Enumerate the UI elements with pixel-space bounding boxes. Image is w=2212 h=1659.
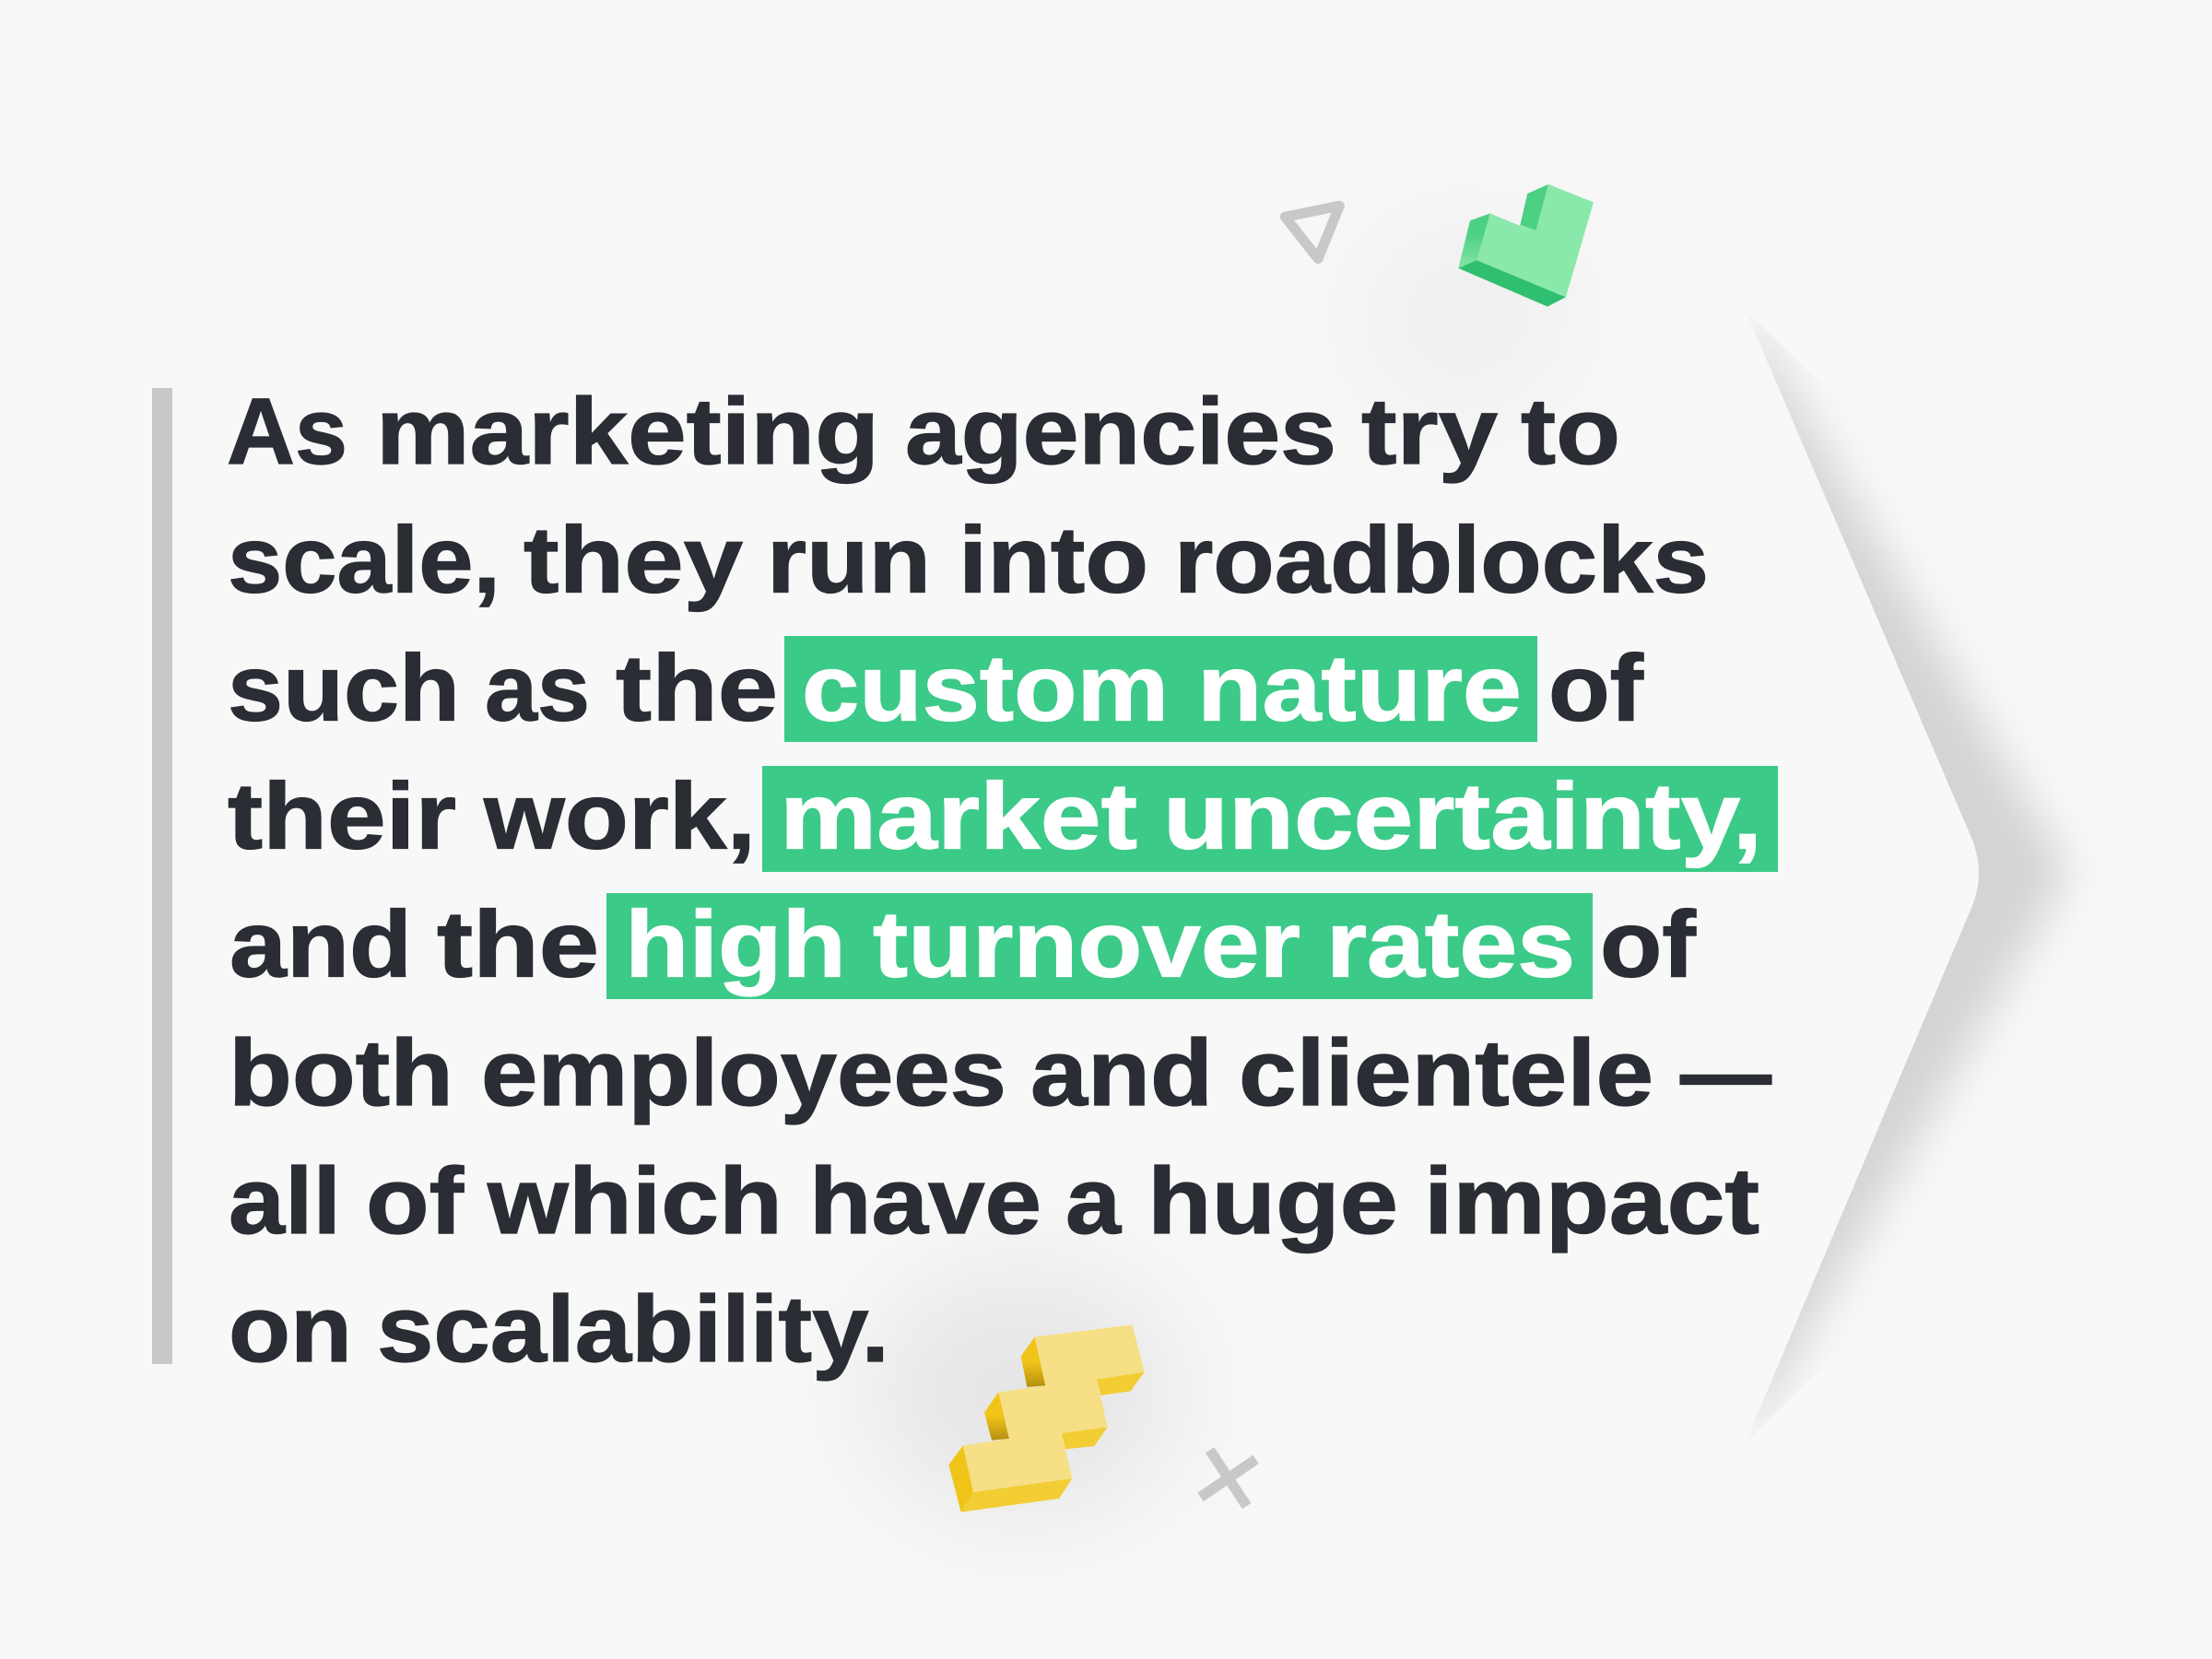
line 2: run: [767, 507, 931, 612]
line 2: into: [959, 507, 1148, 612]
line 5: and: [229, 892, 412, 997]
line 7: which: [487, 1148, 782, 1253]
line 7: huge: [1147, 1148, 1398, 1253]
line 5 end: of: [1600, 892, 1697, 997]
line 7: have: [809, 1148, 1041, 1253]
line 6: clientele: [1239, 1020, 1653, 1125]
highlight: market uncertainty: [762, 763, 1778, 872]
line 7: a: [1065, 1148, 1122, 1253]
highlight: high turnover rates: turnover: [873, 892, 1300, 997]
line 7: impact: [1424, 1148, 1759, 1253]
soft glow behind green block: [1350, 212, 1581, 424]
highlight: market uncertainty: uncertainty,: [1163, 763, 1762, 868]
icon: green 3D block: [1458, 184, 1594, 307]
line 3: the: [616, 636, 778, 741]
icon: grey cross: [1201, 1450, 1256, 1506]
icon: grey triangle outline: [1285, 206, 1339, 259]
line 1: As: [227, 379, 347, 484]
line 1: agencies: [905, 379, 1336, 484]
highlight: custom nature: [784, 636, 1537, 742]
line 3 end: of: [1548, 636, 1644, 741]
line 6: both: [229, 1020, 453, 1125]
line 1: to: [1521, 379, 1620, 484]
vertical accent bar: [152, 388, 172, 1364]
line 8: scalability.: [377, 1277, 889, 1382]
highlight: custom nature: nature: [1197, 636, 1522, 741]
line 3: as: [485, 636, 590, 741]
line 1: try: [1361, 379, 1498, 484]
line 4: their: [228, 763, 456, 868]
line 7: of: [366, 1148, 465, 1253]
arrow panel with shadow: [1755, 331, 2076, 1421]
line 3: such: [228, 636, 460, 741]
line 2: scale,: [228, 507, 500, 612]
line 2: they: [524, 507, 743, 612]
line 6: and: [1030, 1020, 1213, 1125]
highlight: high turnover rates: high: [625, 892, 846, 997]
highlight: high turnover rates: [606, 892, 1593, 999]
soft glow behind yellow block: [862, 1263, 1184, 1521]
line 8: on: [229, 1277, 352, 1382]
line 6: —: [1680, 1020, 1771, 1125]
line 4: work,: [483, 763, 756, 868]
line 2: roadblocks: [1174, 507, 1709, 612]
highlight: custom nature: custom: [802, 636, 1169, 741]
line 1: marketing: [376, 379, 879, 484]
line 7: all: [229, 1148, 341, 1253]
quote text block: [227, 379, 1778, 1382]
highlight: high turnover rates: rates: [1326, 892, 1575, 997]
highlight: market uncertainty: market: [780, 763, 1137, 868]
line 5: the: [437, 892, 599, 997]
line 6: employees: [481, 1020, 1006, 1125]
icon: yellow 3D block: [948, 1324, 1145, 1512]
